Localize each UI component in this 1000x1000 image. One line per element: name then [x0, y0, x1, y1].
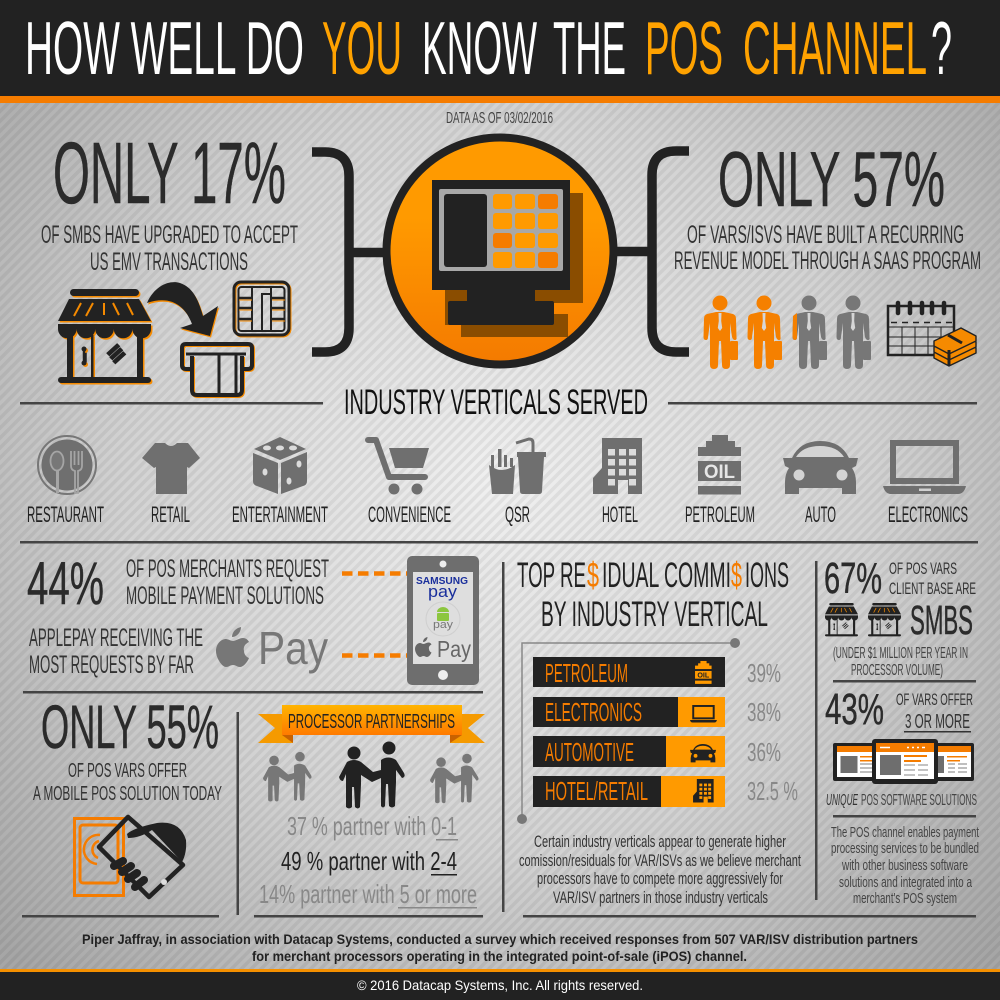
heading: IONS — [745, 556, 789, 595]
panel: mobile payment requests — [27, 550, 479, 685]
heading: $ — [731, 556, 742, 595]
icon: NFC phone tap — [74, 817, 186, 897]
text: client base — [889, 559, 976, 598]
text: applepay requests: MOST REQUESTS BY FAR — [29, 651, 194, 679]
icon: petroleum oil can: OIL — [704, 462, 735, 483]
text: SMBs upgraded: US EMV TRANSACTIONS — [90, 248, 248, 276]
bar: electronics: 38% — [747, 697, 781, 727]
heading: $ — [587, 556, 599, 595]
stat: 67%: 67% — [824, 554, 882, 603]
stat: only 55%: ONLY 55% — [41, 693, 219, 761]
footer: © 2016 Datacap Systems, Inc. All rights reserved. — [357, 977, 643, 993]
title banner: THE — [553, 6, 626, 90]
dashed connectors — [342, 574, 407, 656]
bar chart — [533, 657, 798, 807]
icon: handshake small left — [263, 752, 312, 801]
title banner — [0, 0, 1000, 103]
labels: CONVENIENCE — [368, 502, 451, 527]
bar: petroleum: OIL — [697, 671, 710, 680]
bar: petroleum: 39% — [747, 658, 781, 688]
chart frame connector — [517, 638, 740, 824]
text: 14% partner with 5 or more: 14% partner with 5 or more — [259, 879, 477, 909]
text: merchants request mobile: MOBILE PAYMENT SOLUTIONS — [126, 582, 324, 610]
panel: only 17% of SMBs — [41, 125, 298, 396]
icon: petroleum oil can — [698, 435, 741, 494]
ribbon heading: PROCESSOR PARTNERSHIPS — [288, 710, 455, 733]
panel: only 57% of VARs/ISVs — [674, 135, 981, 369]
labels: RESTAURANT — [27, 502, 104, 527]
icon: storefront — [58, 289, 152, 384]
ribbon heading — [258, 705, 485, 743]
text: SMBs upgraded: OF SMBS HAVE UPGRADED TO ACCEPT — [41, 221, 298, 249]
icon: auto — [783, 441, 858, 494]
title banner: POS — [645, 6, 723, 90]
heading: industry verticals served: INDUSTRY VERTICALS SERVED — [344, 383, 648, 422]
text: commission explanation: processors have to compete more aggressively for — [537, 869, 783, 888]
labels: RETAIL — [151, 502, 190, 527]
stat: only 17%: ONLY 17% — [53, 125, 286, 222]
labels: HOTEL — [602, 502, 638, 527]
labels — [27, 502, 968, 527]
bar: hotel/retail: HOTEL/RETAIL — [545, 776, 648, 806]
icon: phone with wallets — [407, 556, 479, 685]
text: merchants request mobile: OF POS MERCHANTS REQUEST — [126, 555, 329, 583]
icon: handshake small right — [430, 754, 479, 803]
text: client base: OF POS VARS — [889, 559, 957, 578]
icon: electronics laptop — [883, 443, 966, 494]
icon: phone with wallets: SAMSUNG — [416, 576, 468, 587]
heading: BY INDUSTRY VERTICAL — [541, 595, 768, 634]
text: applepay requests — [29, 624, 203, 679]
heading: TOP RE — [517, 556, 586, 595]
text: commission explanation: Certain industry verticals appear to generate higher — [534, 832, 786, 851]
panel: top residual commissions — [517, 556, 801, 907]
text: commission explanation — [519, 832, 801, 907]
icon: hotel — [593, 438, 642, 494]
icon: business people — [704, 296, 871, 369]
text: SMBs upgraded — [41, 221, 298, 276]
text: 37% partner with 0-1: 37 % partner with 0-1 — [287, 811, 457, 841]
bar: automotive: AUTOMOTIVE — [545, 737, 634, 767]
icon: handshake large — [339, 742, 405, 808]
text: survey methodology: for merchant processors operating in the integrated point-of-sale (iPOS) channel. — [252, 948, 747, 964]
bar: petroleum: PETROLEUM — [545, 658, 628, 688]
bracket: left — [312, 152, 386, 352]
icon: calendar — [888, 303, 954, 355]
panel: only 55% mobile POS — [33, 693, 222, 897]
logo: Apple Pay: Pay — [258, 622, 328, 674]
bar: hotel/retail — [533, 776, 798, 807]
icon: QSR fries and drink — [489, 439, 546, 494]
title banner: KNOW — [422, 6, 537, 90]
bar: petroleum — [533, 657, 781, 688]
icon: EMV chip — [234, 282, 290, 336]
icon: software screens — [833, 739, 974, 784]
text: survey methodology: Piper Jaffray, in association with Datacap Systems, conducted a survey which received responses from 507 VAR/ISV distribution partners — [82, 931, 918, 947]
text: commission explanation: VAR/ISV partners in those industry verticals — [553, 888, 768, 907]
icon: card reader — [182, 344, 253, 396]
text: of VARs offer — [896, 690, 973, 733]
icon: phone with wallets: pay — [433, 619, 454, 631]
text: unique POS software — [826, 792, 977, 809]
text: mobile POS solution: A MOBILE POS SOLUTION TODAY — [33, 783, 222, 805]
panel: client base and software — [824, 554, 980, 907]
icon: convenience cart — [368, 440, 429, 494]
text: mobile POS solution: OF POS VARS OFFER — [68, 760, 187, 782]
stat: 44%: 44% — [27, 550, 104, 617]
bar: automotive: 36% — [747, 737, 781, 767]
icon: POS terminal in orange circle — [386, 138, 614, 364]
data date: DATA AS OF 03/02/2016 — [446, 110, 553, 127]
title banner: YOU — [322, 6, 402, 90]
icon: retail t-shirt — [142, 443, 200, 494]
bracket: right — [617, 151, 689, 352]
bar: hotel/retail: 32.5 % — [747, 776, 798, 806]
icon: money stack — [934, 328, 976, 366]
text: applepay requests: APPLEPAY RECEIVING THE — [29, 624, 203, 652]
text: merchants request mobile — [126, 555, 329, 610]
bar: electronics: ELECTRONICS — [545, 697, 642, 727]
icon: restaurant — [38, 436, 96, 494]
heading — [517, 556, 789, 634]
title banner: ? — [931, 6, 952, 90]
text: survey methodology — [82, 931, 918, 964]
text: mobile POS solution — [33, 760, 222, 805]
icon: phone with wallets: pay — [428, 582, 458, 601]
panel: processor partnerships — [258, 705, 485, 909]
text: commission explanation: comission/residuals for VAR/ISVs as we believe merchant — [519, 851, 801, 870]
labels: PETROLEUM — [685, 502, 755, 527]
heading: IDUAL COMMI — [602, 556, 731, 595]
title banner: HOW WELL DO — [25, 6, 304, 90]
labels: QSR — [505, 502, 530, 527]
footer — [0, 969, 1000, 1000]
icon: entertainment dice — [253, 437, 307, 494]
icon: two small stores — [825, 603, 901, 636]
icon: phone with wallets: Pay — [437, 636, 471, 662]
text: 49% partner with 2-4: 49 % partner with 2-4 — [281, 846, 457, 876]
text: recurring revenue — [674, 221, 981, 275]
bar: automotive — [533, 736, 781, 767]
logo: Apple Pay — [216, 622, 328, 674]
labels: AUTO — [805, 502, 836, 527]
text: POS channel bundling — [831, 824, 980, 907]
labels: ENTERTAINMENT — [232, 502, 328, 527]
stat: 43%: 43% — [825, 685, 884, 734]
panel: industry verticals — [27, 435, 968, 527]
icon: curved arrow — [147, 282, 219, 338]
text: unique POS software: UNIQUE — [826, 792, 858, 809]
text: under $1 million — [833, 645, 968, 679]
